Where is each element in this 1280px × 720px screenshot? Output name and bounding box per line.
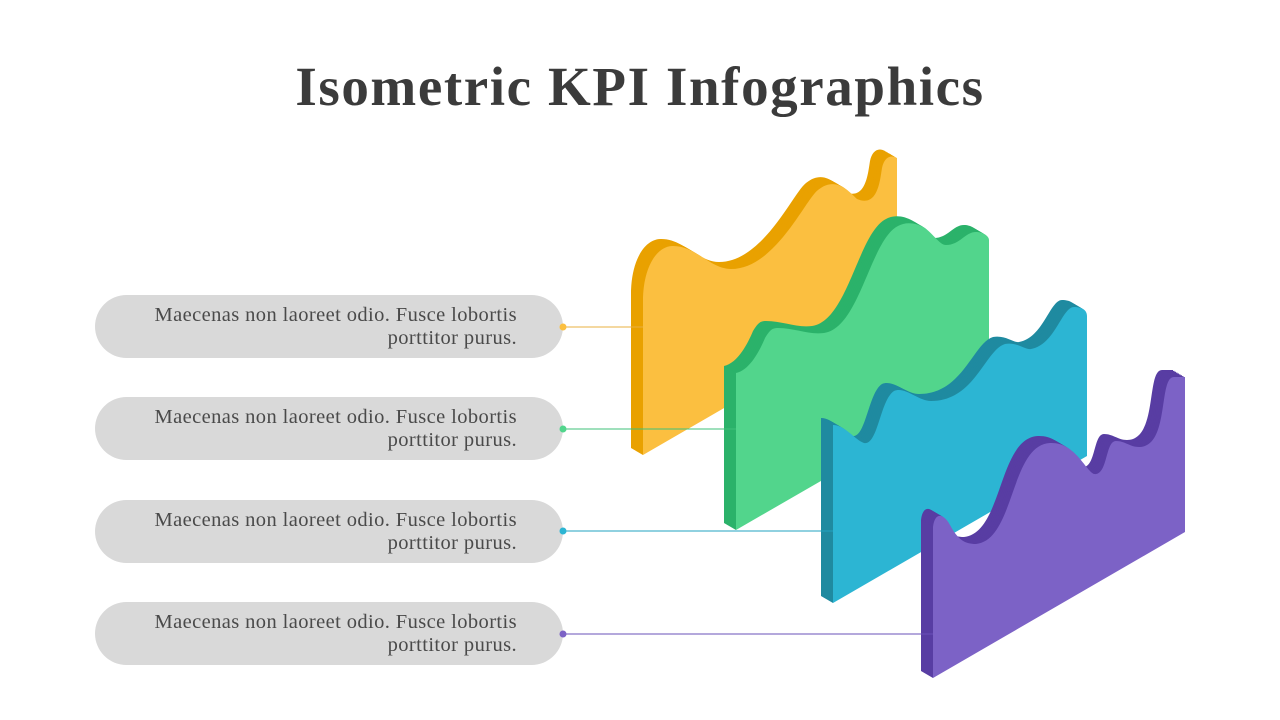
text pill 3 [95, 500, 563, 563]
shape: yellow wave [631, 149, 897, 455]
text pill 4: porttitor purus. [388, 634, 517, 656]
text pill 3: porttitor purus. [388, 532, 517, 554]
text pill 2: porttitor purus. [388, 428, 517, 450]
text pill 1 [95, 295, 563, 358]
text pill 1: Maecenas non laoreet odio. Fusce lobortis [154, 304, 517, 326]
connector 1 [560, 324, 643, 330]
text pill 4: Maecenas non laoreet odio. Fusce lobortis [154, 610, 517, 632]
title: Isometric KPI Infographics [295, 56, 985, 117]
text pill 1: porttitor purus. [388, 326, 517, 348]
shape: green wave [724, 216, 989, 530]
connector 4 [560, 630, 933, 638]
text pill 3: Maecenas non laoreet odio. Fusce lobortis [154, 508, 517, 530]
text pill 4 [95, 602, 563, 665]
connector 3 [560, 528, 833, 534]
shape: blue wave [821, 300, 1087, 603]
shape: purple wave [921, 370, 1185, 678]
connector 2 [560, 426, 736, 432]
text pill 2 [95, 397, 563, 460]
text pill 2: Maecenas non laoreet odio. Fusce lobortis [154, 406, 517, 428]
